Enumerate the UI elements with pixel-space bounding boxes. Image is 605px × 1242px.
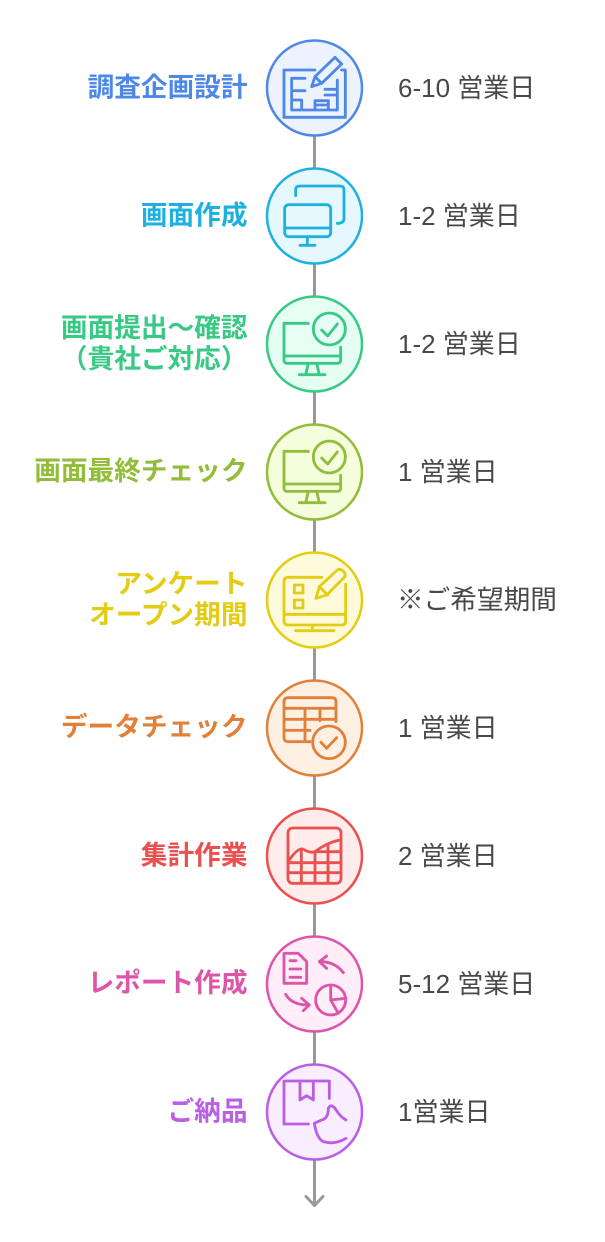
node circle: step 8 bbox=[267, 936, 362, 1032]
step 7: tabulation bbox=[141, 808, 498, 904]
step 2: screen creation bbox=[141, 168, 521, 264]
node circle: step 5 bbox=[267, 552, 362, 648]
step 8: report creation bbox=[88, 936, 535, 1032]
duration: step 7: 2 営業日 bbox=[398, 841, 498, 871]
timeline connector with arrow bbox=[306, 130, 323, 1206]
icon: monitors bbox=[285, 186, 344, 245]
duration: step 9: 1営業日 bbox=[398, 1097, 490, 1127]
step 1: survey design bbox=[88, 40, 535, 136]
icon: monitor with check bbox=[284, 313, 345, 375]
label: step 5: オープン期間 bbox=[89, 600, 248, 630]
duration: step 8: 5-12 営業日 bbox=[398, 969, 535, 999]
duration: step 5: ※ご希望期間 bbox=[397, 585, 557, 615]
step 6: data check bbox=[61, 680, 498, 776]
node circle: step 3 bbox=[267, 296, 362, 392]
step 3: screen submission and confirmation bbox=[61, 296, 521, 392]
node circle: step 6 bbox=[267, 680, 362, 776]
node circle: step 2 bbox=[267, 168, 362, 264]
node circle: step 4 bbox=[267, 424, 362, 520]
duration: step 3: 1-2 営業日 bbox=[398, 329, 521, 359]
label: step 8: レポート作成 bbox=[88, 968, 248, 998]
label: step 3: 画面提出～確認 bbox=[61, 313, 248, 343]
icon: table with check bbox=[284, 698, 345, 759]
label: step 3: （貴社ご対応） bbox=[61, 344, 248, 374]
step 4: final screen check bbox=[34, 424, 498, 520]
node circle: step 1 bbox=[267, 40, 362, 136]
label: step 6: データチェック bbox=[61, 712, 248, 742]
node circle: step 9 bbox=[267, 1064, 362, 1160]
duration: step 4: 1 営業日 bbox=[398, 457, 498, 487]
label: step 2: 画面作成 bbox=[141, 200, 248, 230]
duration: step 6: 1 営業日 bbox=[398, 713, 498, 743]
label: step 1: 調査企画設計 bbox=[88, 72, 248, 102]
label: step 4: 画面最終チェック bbox=[34, 456, 248, 486]
duration: step 1: 6-10 営業日 bbox=[398, 73, 535, 103]
icon: monitor with check bbox=[284, 441, 345, 503]
label: step 7: 集計作業 bbox=[141, 840, 248, 870]
icon: blueprint and pencil bbox=[284, 57, 345, 117]
icon: package and hand bbox=[284, 1081, 346, 1143]
icon: form on monitor with pencil bbox=[284, 569, 346, 631]
duration: step 2: 1-2 営業日 bbox=[398, 201, 521, 231]
node circle: step 7 bbox=[267, 808, 362, 904]
icon: chart grid bbox=[288, 828, 341, 883]
icon: document, arrows and pie chart bbox=[284, 953, 346, 1015]
step 9: delivery bbox=[168, 1064, 490, 1160]
step 5: survey open period bbox=[89, 552, 557, 648]
label: step 5: アンケート bbox=[115, 569, 248, 599]
label: step 9: ご納品 bbox=[168, 1096, 248, 1126]
